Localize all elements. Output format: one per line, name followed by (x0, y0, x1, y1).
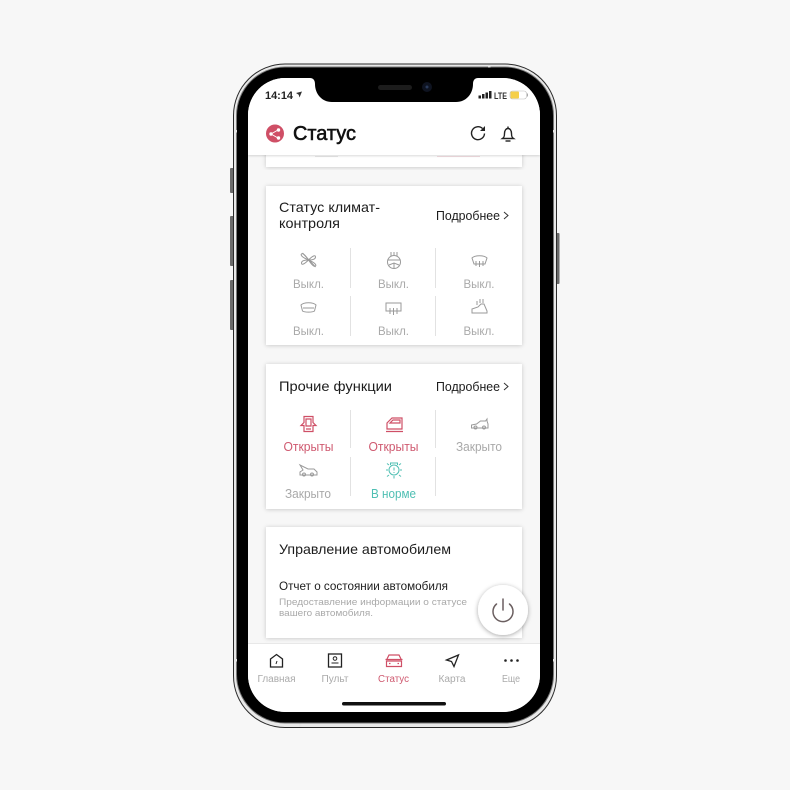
icon: footwell heat (472, 299, 487, 313)
phone mockup infographic (230, 64, 560, 728)
heading: other functions: Прочие функции (279, 378, 392, 394)
label: closed: Закрыто (456, 440, 502, 454)
icon: seat heat (388, 252, 400, 268)
link: more details: Подробнее (436, 209, 500, 223)
label: off: Выкл. (293, 324, 324, 338)
screen (248, 78, 540, 712)
panel: previous card remnant (264, 155, 524, 170)
icon: rear defrost (386, 303, 401, 315)
tab: remote (322, 654, 349, 685)
text: report description: вашего автомобиля. (279, 608, 373, 619)
text: report description: Предоставление информации о статусе (279, 597, 467, 608)
icon: front defrost (472, 256, 487, 267)
tab: home (258, 654, 296, 685)
tab: map (438, 655, 466, 685)
icon: windows open (386, 418, 403, 432)
heading: climate control: Статус климат- (279, 199, 380, 215)
label: closed: Закрыто (285, 487, 331, 501)
tab: home: Главная (258, 674, 296, 685)
status bar: signal, LTE, battery: LTE (494, 91, 507, 101)
label: open: Открыты (368, 440, 419, 454)
status bar: time: 14:14 (265, 90, 294, 102)
panel: vehicle management (266, 527, 522, 638)
icon: share (266, 124, 284, 142)
power button (478, 585, 528, 635)
panel: climate control status (266, 186, 522, 345)
icon: fan off (301, 253, 316, 267)
heading: vehicle management: Управление автомобилем (279, 541, 451, 557)
link: more details: Подробнее (436, 380, 500, 394)
icon: trunk closed (472, 419, 488, 429)
home indicator (342, 702, 446, 706)
text: vehicle report: Отчет о состоянии автомобиля (279, 581, 448, 593)
tab: more (502, 659, 520, 685)
tab: more: Еще (502, 674, 520, 685)
icon: refresh (472, 126, 485, 140)
phone body (230, 64, 560, 728)
panel: other functions (266, 364, 522, 509)
tab: status active: Статус (378, 674, 409, 685)
icon: windshield (301, 303, 316, 312)
tab: remote: Пульт (322, 674, 349, 685)
label: off: Выкл. (464, 324, 494, 338)
label: off: Выкл. (378, 324, 409, 338)
header bar (248, 78, 540, 155)
icon: bell (502, 126, 514, 141)
bottom tab bar (248, 643, 540, 712)
tab: status active (378, 655, 409, 685)
status bar: time (266, 92, 302, 99)
label: normal: В норме (371, 487, 416, 501)
tab: map: Карта (438, 674, 466, 685)
icon: hood closed (300, 465, 317, 476)
label: off: Выкл. (293, 277, 324, 291)
notch (310, 78, 478, 102)
label: off: Выкл. (464, 277, 494, 291)
heading: climate control: контроля (279, 215, 340, 231)
label: off: Выкл. (378, 277, 409, 291)
title: Статус (293, 123, 356, 145)
label: open: Открыты (284, 440, 334, 454)
icon: doors open (301, 416, 316, 432)
status bar: signal, LTE, battery (478, 90, 528, 100)
icon: alarm normal (386, 463, 402, 478)
